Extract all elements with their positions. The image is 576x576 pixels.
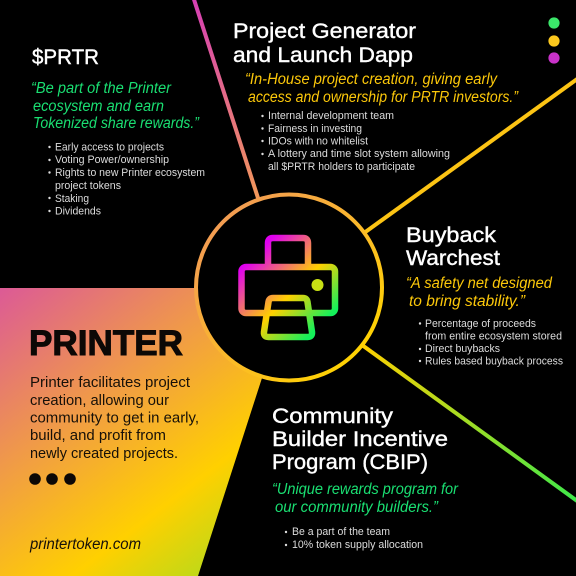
bullet list xyxy=(285,526,423,551)
description text: build, and profit from xyxy=(30,427,166,444)
icon: printer xyxy=(242,238,335,337)
bullet list: all $PRTR holders to participate xyxy=(268,161,415,173)
bullet list: Rights to new Printer ecosystem xyxy=(55,167,205,179)
quote: “In-House project creation, giving early xyxy=(245,71,498,88)
heading: Buyback Warchest xyxy=(406,223,500,270)
bullet list: Early access to projects xyxy=(55,142,164,154)
connector line: top xyxy=(194,0,258,198)
quote: Tokenized share rewards.” xyxy=(33,115,200,132)
quote: our community builders.” xyxy=(275,499,439,516)
bullet list: Rules based buyback process xyxy=(425,356,563,368)
description text: newly created projects. xyxy=(30,445,178,462)
bullet list: Voting Power/ownership xyxy=(55,154,169,166)
bullet list xyxy=(48,142,205,218)
bullet list: Percentage of proceeds xyxy=(425,318,536,330)
connector line: upper right xyxy=(364,77,576,233)
heading: Project Generator and Launch Dapp xyxy=(233,19,416,67)
quote: ecosystem and earn xyxy=(33,98,164,115)
bullet list: Direct buybacks xyxy=(425,343,500,355)
bullet list: Staking xyxy=(55,193,89,205)
heading: CBIP xyxy=(272,404,448,474)
quote: “Unique rewards program for xyxy=(272,481,459,498)
bullet list: Be a part of the team xyxy=(292,526,390,538)
status dots xyxy=(548,17,560,64)
heading: $PRTR: $PRTR xyxy=(32,45,99,69)
heading: CBIP: Builder Incentive xyxy=(272,427,448,451)
bullet list: Internal development team xyxy=(268,110,394,122)
quote xyxy=(31,80,200,132)
description text: Printer facilitates project xyxy=(30,374,191,391)
quote xyxy=(245,71,519,106)
quote: to bring stability.” xyxy=(409,293,526,310)
website link: printertoken.com xyxy=(29,536,141,553)
heading: Buyback Warchest: Warchest xyxy=(406,246,500,270)
panel: Community Builder Incentive Program xyxy=(272,404,459,551)
heading: CBIP: Program (CBIP) xyxy=(272,450,428,474)
quote: “A safety net designed xyxy=(406,275,553,292)
bullet list: IDOs with no whitelist xyxy=(268,136,368,148)
three dots xyxy=(29,473,76,485)
heading: Buyback Warchest: Buyback xyxy=(406,223,496,247)
bullet list: Fairness in investing xyxy=(268,123,362,135)
quote xyxy=(272,481,459,516)
panel: $PRTR xyxy=(31,45,205,218)
description text: community to get in early, xyxy=(30,410,199,426)
bullet list: A lottery and time slot system allowing xyxy=(268,148,450,160)
description text xyxy=(30,374,199,462)
bullet list: from entire ecosystem stored xyxy=(425,330,562,342)
description text: creation, allowing our xyxy=(30,392,169,409)
panel: Printer brand xyxy=(0,288,262,576)
quote: “Be part of the Printer xyxy=(31,80,172,97)
heading: PRINTER: PRINTER xyxy=(29,324,183,363)
connector line: lower right xyxy=(362,345,576,503)
heading: Project Generator and Launch Dapp: Project Generator xyxy=(233,19,416,43)
center circle xyxy=(196,194,382,380)
heading: CBIP: Community xyxy=(272,404,393,428)
bullet list: project tokens xyxy=(55,180,121,192)
bullet list xyxy=(261,110,450,173)
quote xyxy=(406,275,553,310)
bullet list: 10% token supply allocation xyxy=(292,539,423,551)
heading: Project Generator and Launch Dapp: and Launch Dapp xyxy=(233,43,413,67)
quote: access and ownership for PRTR investors.” xyxy=(248,89,519,106)
bullet list xyxy=(419,318,563,368)
panel: Buyback Warchest xyxy=(406,223,563,368)
panel: Project Generator xyxy=(233,19,519,173)
bullet list: Dividends xyxy=(55,206,101,218)
